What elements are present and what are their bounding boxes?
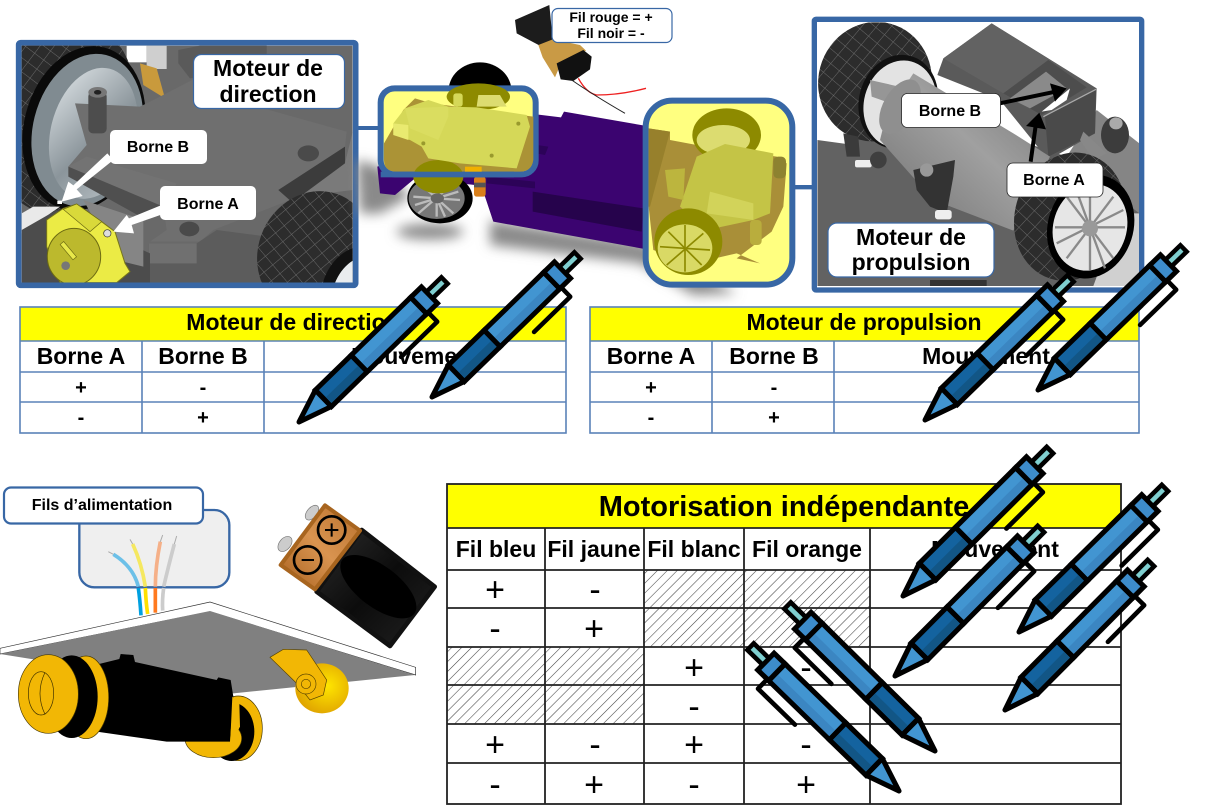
label: fils d'alimentation: Fils d’alimentation <box>32 497 172 514</box>
table: motorisation indépendante: Mouvement <box>931 536 1059 562</box>
label: borne B <box>110 130 207 164</box>
yellow stripe right <box>230 697 240 747</box>
label: fil rouge / fil noir: Fil noir = - <box>577 25 645 41</box>
table: motorisation indépendante: + <box>796 688 816 726</box>
table: motorisation indépendante: + <box>684 726 704 764</box>
table: moteur de propulsion: - <box>648 407 654 429</box>
table: motorisation indépendante: Fil jaune <box>547 536 641 562</box>
label: borne A <box>1007 163 1103 197</box>
left wheel <box>18 655 109 739</box>
table: moteur de direction: - <box>200 377 206 399</box>
connector line <box>795 185 815 189</box>
motor body <box>95 654 233 742</box>
table: moteur de direction <box>20 307 566 433</box>
label: fil rouge / fil noir <box>552 8 672 42</box>
table: moteur de direction: - <box>78 407 84 429</box>
table: motorisation indépendante: - <box>589 571 601 609</box>
icon: pen 10 <box>733 638 907 809</box>
photo: propulsion motor view <box>805 9 1148 295</box>
label: fils d'alimentation <box>4 488 203 524</box>
label: borne A: Borne A <box>1023 172 1085 189</box>
label: moteur de direction: Moteur de <box>213 55 323 81</box>
wires window <box>79 510 229 615</box>
table: moteur de direction: Moteur de direction <box>186 309 400 335</box>
label: moteur de propulsion: propulsion <box>852 249 970 275</box>
left yellow highlight <box>381 83 536 193</box>
table: motorisation indépendante: - <box>688 766 700 804</box>
rear wheel <box>448 62 512 121</box>
icon: pen 6 <box>887 521 1059 694</box>
label: moteur de propulsion: Moteur de <box>856 224 966 250</box>
table: moteur de propulsion: Borne B <box>729 343 819 369</box>
label: moteur de propulsion <box>828 223 994 277</box>
connector line <box>355 126 385 130</box>
table: motorisation indépendante: - <box>800 726 812 764</box>
icon: pen 5 <box>895 442 1068 614</box>
label: borne A: Borne A <box>177 196 239 213</box>
table: motorisation indépendante: - <box>800 649 812 687</box>
table: motorisation indépendante: Motorisation indépendante <box>599 491 969 523</box>
table: moteur de direction: + <box>75 377 87 399</box>
illustration: car chassis <box>357 5 813 295</box>
panel: moteur de propulsion <box>795 9 1148 295</box>
icon: pen 2 <box>424 247 595 415</box>
table: moteur de propulsion: Borne A <box>607 343 695 369</box>
yellow motor <box>47 201 130 285</box>
photo: direction motor view <box>16 40 358 288</box>
label: borne B: Borne B <box>127 139 189 156</box>
table: motorisation indépendante: - <box>489 610 501 648</box>
right yellow highlight <box>646 101 792 285</box>
table: moteur de propulsion: + <box>768 407 780 429</box>
connector right <box>793 181 813 193</box>
table: moteur de propulsion: Mouvement <box>922 343 1050 369</box>
arrows <box>1000 83 1067 162</box>
front wheel <box>407 173 486 223</box>
table: motorisation indépendante: Fil blanc <box>647 536 741 562</box>
illustration: fils d'alimentation <box>0 503 435 761</box>
car shadow <box>357 160 737 295</box>
label: moteur de direction <box>194 54 344 108</box>
caster wheel <box>270 649 349 713</box>
purple body <box>377 112 647 249</box>
label: borne A <box>160 186 256 220</box>
right wheel <box>185 696 262 761</box>
table: moteur de propulsion: - <box>771 377 777 399</box>
icon: pen 9 <box>770 597 943 769</box>
table: motorisation indépendante: Fil orange <box>752 536 862 562</box>
table: motorisation indépendante: + <box>485 571 505 609</box>
table: moteur de propulsion: + <box>645 377 657 399</box>
hatched cells <box>447 570 870 724</box>
table: motorisation indépendante: + <box>684 649 704 687</box>
table: motorisation indépendante: + <box>485 726 505 764</box>
table: moteur de direction: Borne A <box>37 343 125 369</box>
icon: pen 1 <box>291 272 462 440</box>
icon: pen 3 <box>917 270 1088 438</box>
table: motorisation indépendante: + <box>796 766 816 804</box>
panel: moteur de direction <box>16 40 378 288</box>
table: moteur de propulsion: Moteur de propulsion <box>746 309 982 335</box>
table: motorisation indépendante: - <box>489 766 501 804</box>
table: moteur de direction: + <box>197 407 209 429</box>
table: moteur de direction: Borne B <box>158 343 248 369</box>
label: moteur de direction: direction <box>219 81 317 107</box>
icon: pen 8 <box>997 555 1169 728</box>
table: moteur de propulsion <box>590 307 1139 433</box>
table: motorisation indépendante: Fil bleu <box>456 536 536 562</box>
label: fil rouge / fil noir: Fil rouge = + <box>569 9 653 25</box>
table: motorisation indépendante: - <box>688 688 700 726</box>
table: motorisation indépendante: - <box>589 726 601 764</box>
table: motorisation indépendante: + <box>584 766 604 804</box>
table: motorisation indépendante <box>447 484 1121 804</box>
table: motorisation indépendante: + <box>584 610 604 648</box>
arrows <box>62 153 165 233</box>
table: moteur de direction: Mouvement <box>351 343 479 369</box>
label: borne B <box>902 94 1000 128</box>
label: borne B: Borne B <box>919 103 981 120</box>
plate <box>0 602 416 693</box>
icon: pen 7 <box>1011 480 1182 650</box>
icon: pen 4 <box>1030 240 1201 408</box>
battery with leads <box>515 5 646 113</box>
icon: 9V battery <box>275 503 435 646</box>
